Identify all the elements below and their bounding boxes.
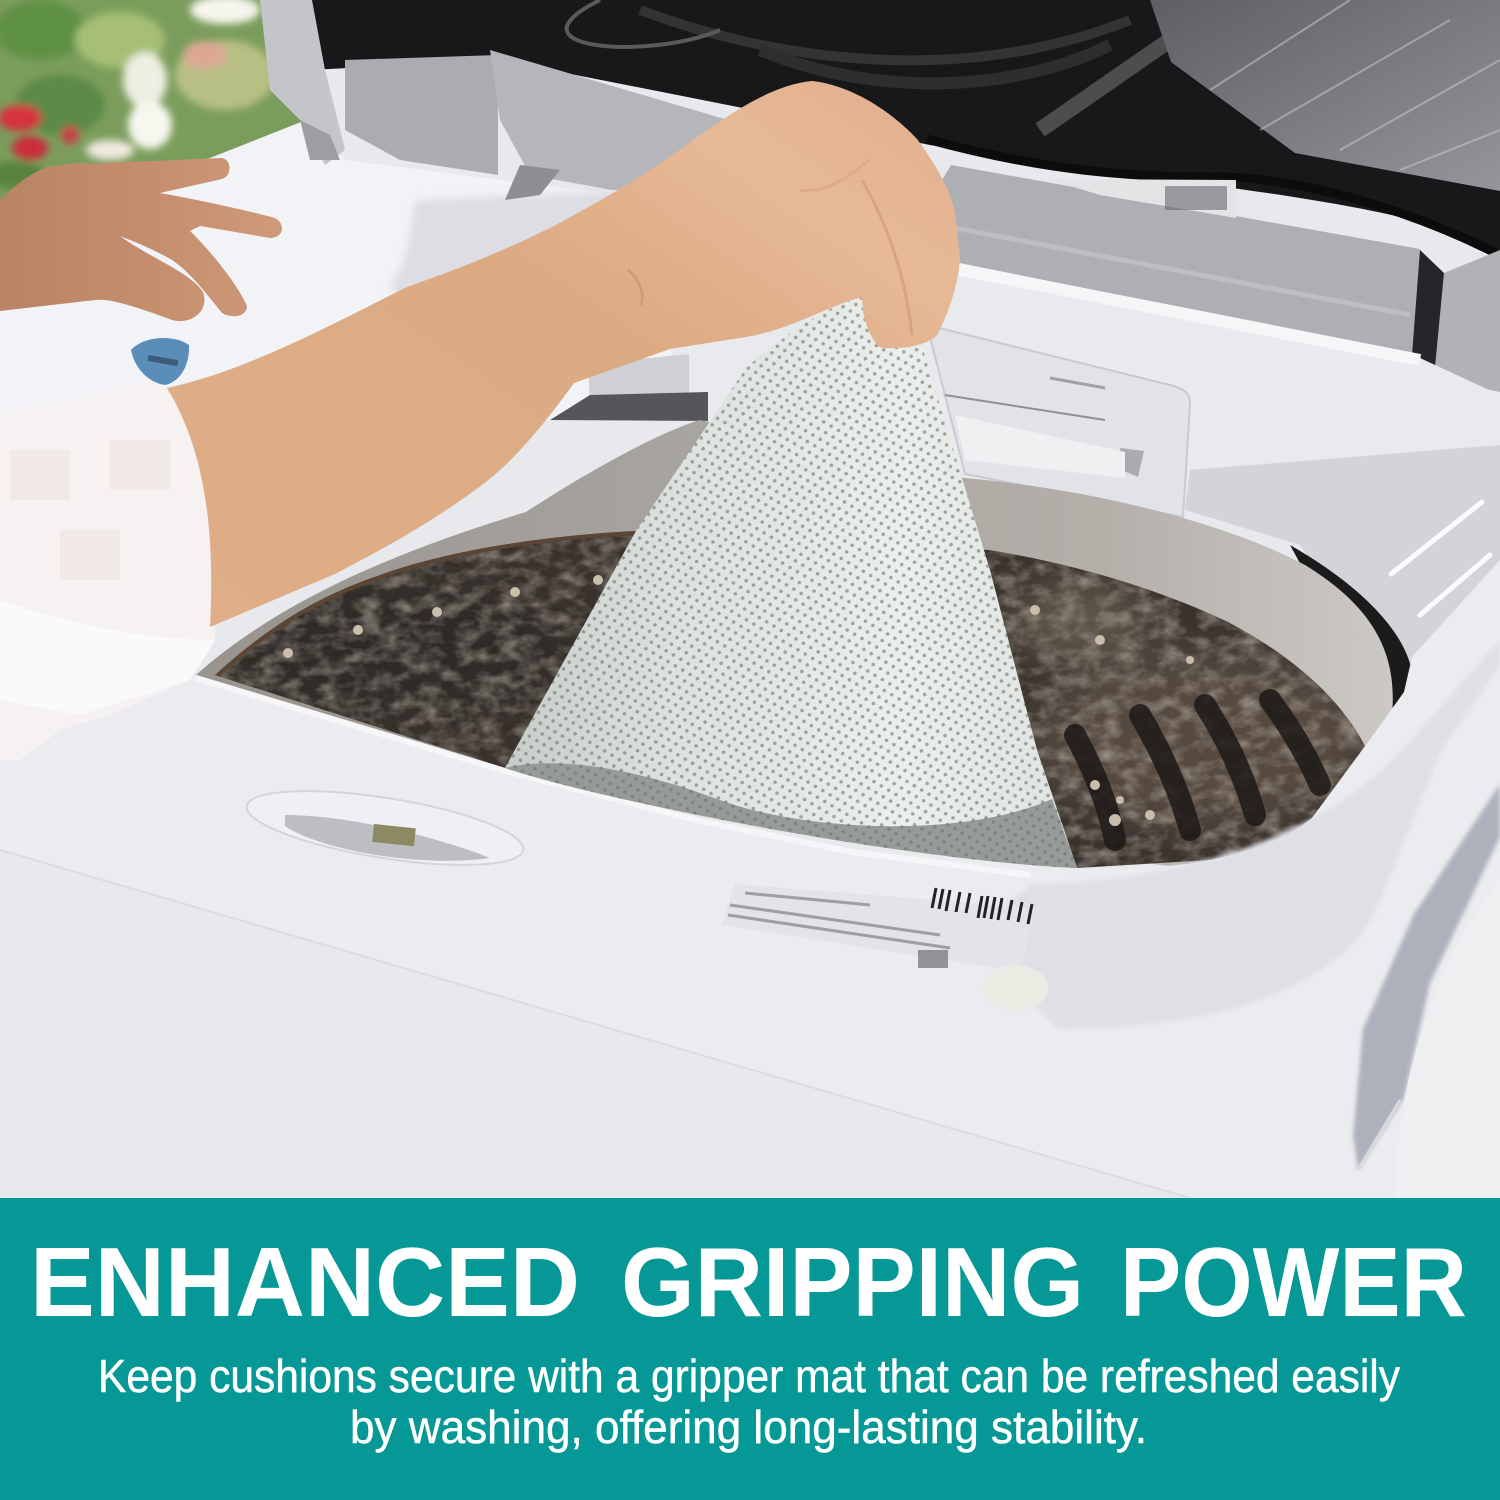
lid lock slot: [242, 776, 528, 880]
dark open lid: [300, 0, 1500, 260]
rating label and barcode: [722, 884, 1048, 1011]
description text: Keep cushions secure with a gripper mat that can be refreshed easily: [98, 1350, 1400, 1402]
back ledge behind the tub: [550, 262, 1500, 520]
photo: washing machine scene: [0, 0, 1500, 1198]
front deck of washer: [0, 560, 1500, 1198]
heading: ENHANCED: [30, 1227, 580, 1337]
background foliage and flowers: [0, 0, 320, 210]
blue control badge: [131, 338, 189, 385]
hinge column: [260, 0, 345, 165]
mat rolled cone: [505, 297, 1077, 868]
heading: POWER: [1120, 1227, 1467, 1337]
white lid and recess: [0, 120, 760, 420]
tub rim: [196, 420, 1393, 870]
sleeve: [0, 378, 215, 760]
translucent raised band around opening: [970, 640, 1500, 1029]
detergent drawer: [927, 325, 1190, 517]
heading: GRIPPING: [621, 1227, 1084, 1337]
left hand on lid: [0, 158, 282, 321]
gray inner lid panels: [300, 50, 1500, 392]
washer base colour: [0, 0, 1500, 1198]
heading: [30, 1227, 1467, 1337]
description text: by washing, offering long-lasting stability.: [350, 1401, 1147, 1453]
arm and hand holding mat: [167, 81, 960, 627]
description text: [98, 1350, 1400, 1453]
banner panel: [0, 1198, 1500, 1500]
right gray gap and neighbouring appliance: [1353, 784, 1500, 1198]
right deck shading and highlights: [1185, 445, 1500, 720]
drum interior: [215, 531, 1365, 868]
black gap beside tub rim: [1290, 545, 1414, 735]
